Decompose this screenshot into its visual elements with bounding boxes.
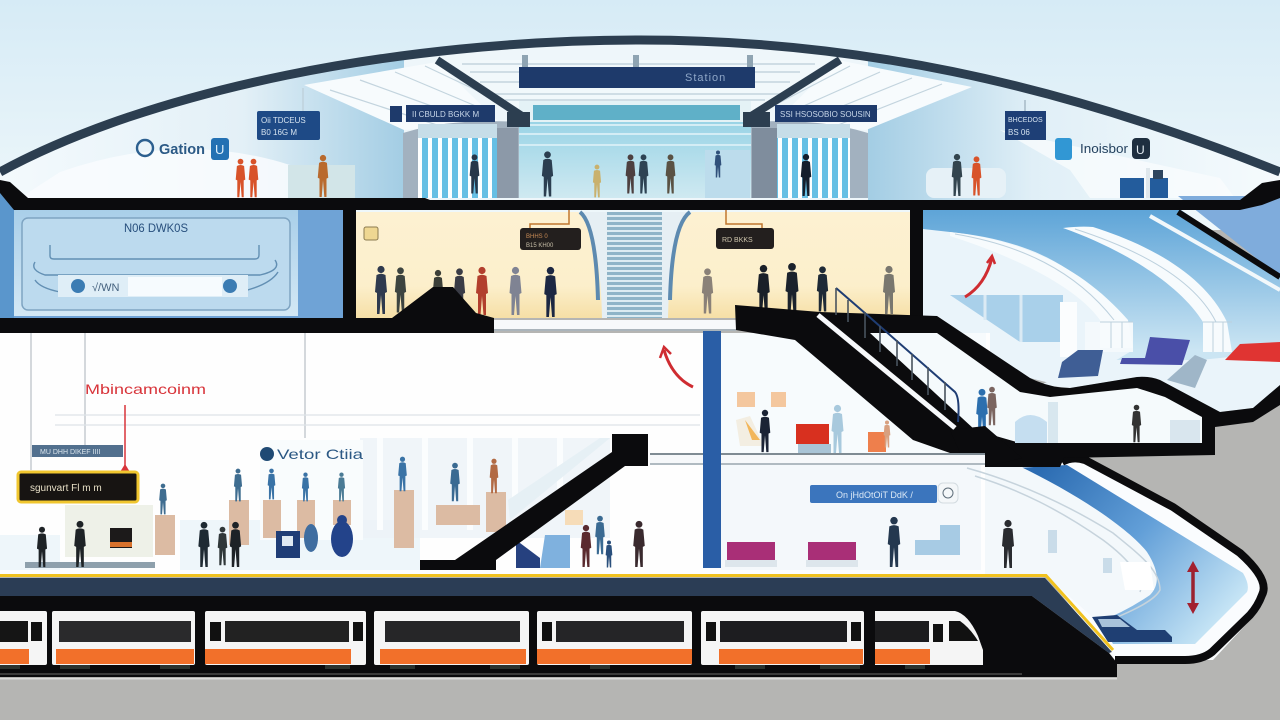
glass wall bbox=[950, 295, 1063, 342]
lounge area bbox=[736, 392, 890, 453]
escalator foot landing bbox=[950, 426, 1022, 467]
car 3 bbox=[205, 611, 366, 665]
ticket desk bbox=[1120, 168, 1168, 198]
curved black band and escalator structure bbox=[735, 305, 1280, 467]
right concourse banner bbox=[775, 105, 877, 122]
right glass gate bbox=[751, 121, 868, 198]
lounge benches bbox=[725, 525, 960, 567]
left departures sign: Oii TDCEUS bbox=[261, 116, 306, 125]
left slat lines bbox=[330, 66, 497, 126]
red double arrow bbox=[1187, 561, 1199, 614]
left concourse banner: II CBULD BGKK M bbox=[412, 110, 479, 119]
pod standing people bbox=[888, 517, 1014, 568]
label: left hall: U bbox=[215, 142, 224, 157]
label: right hall: Inoisbor bbox=[1080, 141, 1129, 156]
left yellow hall sign bbox=[520, 210, 581, 250]
small wall icon bbox=[364, 227, 378, 240]
skylight arc one bbox=[950, 232, 1133, 348]
exhibit pedestals bbox=[155, 490, 506, 555]
exhibit label bbox=[260, 446, 363, 462]
overhead central sign bbox=[519, 67, 755, 88]
red curved arrow upper bbox=[965, 256, 995, 297]
roof arc bbox=[0, 40, 1280, 172]
diagonal black escalator bbox=[420, 434, 648, 570]
lower right room fittings and people bbox=[976, 387, 1200, 443]
pale platform edge bbox=[0, 678, 1117, 680]
grey directory sign bbox=[32, 445, 123, 457]
left ceiling slats bbox=[304, 62, 502, 130]
car 6 bbox=[701, 611, 864, 665]
track canopy bbox=[0, 578, 1117, 677]
panel: lower concourse bbox=[0, 333, 990, 574]
red curved arrow centre bbox=[660, 347, 693, 387]
waiting seats bbox=[516, 510, 583, 568]
left departures sign bbox=[257, 88, 320, 140]
yellow canopy line bbox=[0, 576, 1113, 650]
control room title: N06 DWK0S bbox=[124, 221, 188, 235]
central ceiling bbox=[442, 55, 838, 125]
red callout title: Mbincamcoinm bbox=[85, 381, 206, 397]
gray ground and exterior bbox=[0, 400, 1280, 680]
pod outer wall bbox=[1062, 458, 1264, 660]
roof hall interior bbox=[0, 30, 1280, 200]
upper room inner curve fill bbox=[870, 333, 1202, 443]
car 2 bbox=[52, 611, 195, 665]
thin mezzanine bridge bbox=[494, 320, 736, 331]
blue floor sign: On jHdOtOiT DdK / bbox=[836, 490, 913, 500]
lounge floor bbox=[1040, 352, 1280, 412]
panel: yellow concourse bbox=[356, 212, 910, 318]
pod pale interior bbox=[985, 465, 1157, 622]
right departures sign: BHCEDOS bbox=[1008, 117, 1043, 124]
yellow framed sign bbox=[18, 472, 138, 502]
lounge seats bbox=[1058, 337, 1280, 388]
escalator railing bbox=[818, 288, 959, 428]
middle-level black dividers bbox=[343, 208, 923, 320]
panel: left control room: √/WN bbox=[92, 282, 119, 294]
left yellow hall sign: BHHS 0 bbox=[526, 234, 548, 240]
label: left hall bbox=[137, 138, 229, 160]
central ceiling: Station bbox=[685, 72, 726, 84]
glass balustrade bbox=[508, 438, 610, 520]
ticket machine and figure bbox=[276, 515, 353, 558]
exhibit figures bbox=[159, 457, 498, 514]
far-right blue bay bbox=[1178, 196, 1280, 277]
skylight arc two bbox=[1063, 227, 1232, 352]
ceiling hanger lines bbox=[31, 333, 700, 470]
parked car bbox=[1092, 615, 1172, 642]
kiosk bbox=[25, 505, 155, 568]
label: right hall: U bbox=[1136, 143, 1145, 157]
left yellow hall sign: B15 KH00 bbox=[526, 243, 554, 249]
left glass gate bbox=[403, 121, 519, 198]
panel: left control room bbox=[0, 190, 344, 320]
right departures sign: BS 06 bbox=[1008, 128, 1030, 137]
panel: lower right curved pod bbox=[967, 459, 1267, 660]
train bbox=[0, 611, 983, 665]
car 4 bbox=[374, 611, 529, 665]
car 5 bbox=[537, 611, 692, 665]
left departures sign: B0 16G M bbox=[261, 128, 297, 137]
lead car bbox=[875, 611, 983, 665]
sky background bbox=[0, 0, 1280, 230]
panel: upper right curved hall bbox=[923, 196, 1280, 412]
central blue column bbox=[703, 331, 721, 568]
car 1 bbox=[0, 611, 47, 665]
right concourse banner: SSI HSOSOBIO SOUSIN bbox=[780, 110, 871, 119]
left concourse banner bbox=[390, 105, 495, 122]
track rail bbox=[0, 667, 1022, 675]
hall people bbox=[236, 151, 981, 197]
yellow framed sign: sgunvart Fl m m bbox=[30, 483, 102, 494]
central platform room bbox=[519, 101, 751, 198]
blue floor sign bbox=[810, 483, 958, 503]
beams of the roof bbox=[437, 60, 840, 127]
right ceiling slats bbox=[772, 60, 972, 130]
pod blue glass bbox=[1017, 465, 1248, 644]
exhibit label: Vetor Ctiia bbox=[277, 446, 363, 462]
label: left hall: Gation bbox=[159, 141, 205, 158]
grey directory sign: MU DHH DIKEF IIII bbox=[40, 449, 100, 456]
mezzanine deck bbox=[650, 453, 990, 465]
right departures sign bbox=[1005, 100, 1046, 140]
label: right hall bbox=[1055, 138, 1150, 160]
central escalator bbox=[578, 212, 692, 318]
left middle slab bbox=[0, 287, 494, 333]
hall floor slab bbox=[0, 180, 1280, 210]
concourse people bbox=[375, 263, 895, 317]
lower concourse people bbox=[37, 516, 645, 567]
callout arrow bbox=[120, 405, 130, 472]
right yellow hall sign: RD BKKS bbox=[722, 237, 753, 244]
right yellow hall sign bbox=[716, 210, 774, 249]
